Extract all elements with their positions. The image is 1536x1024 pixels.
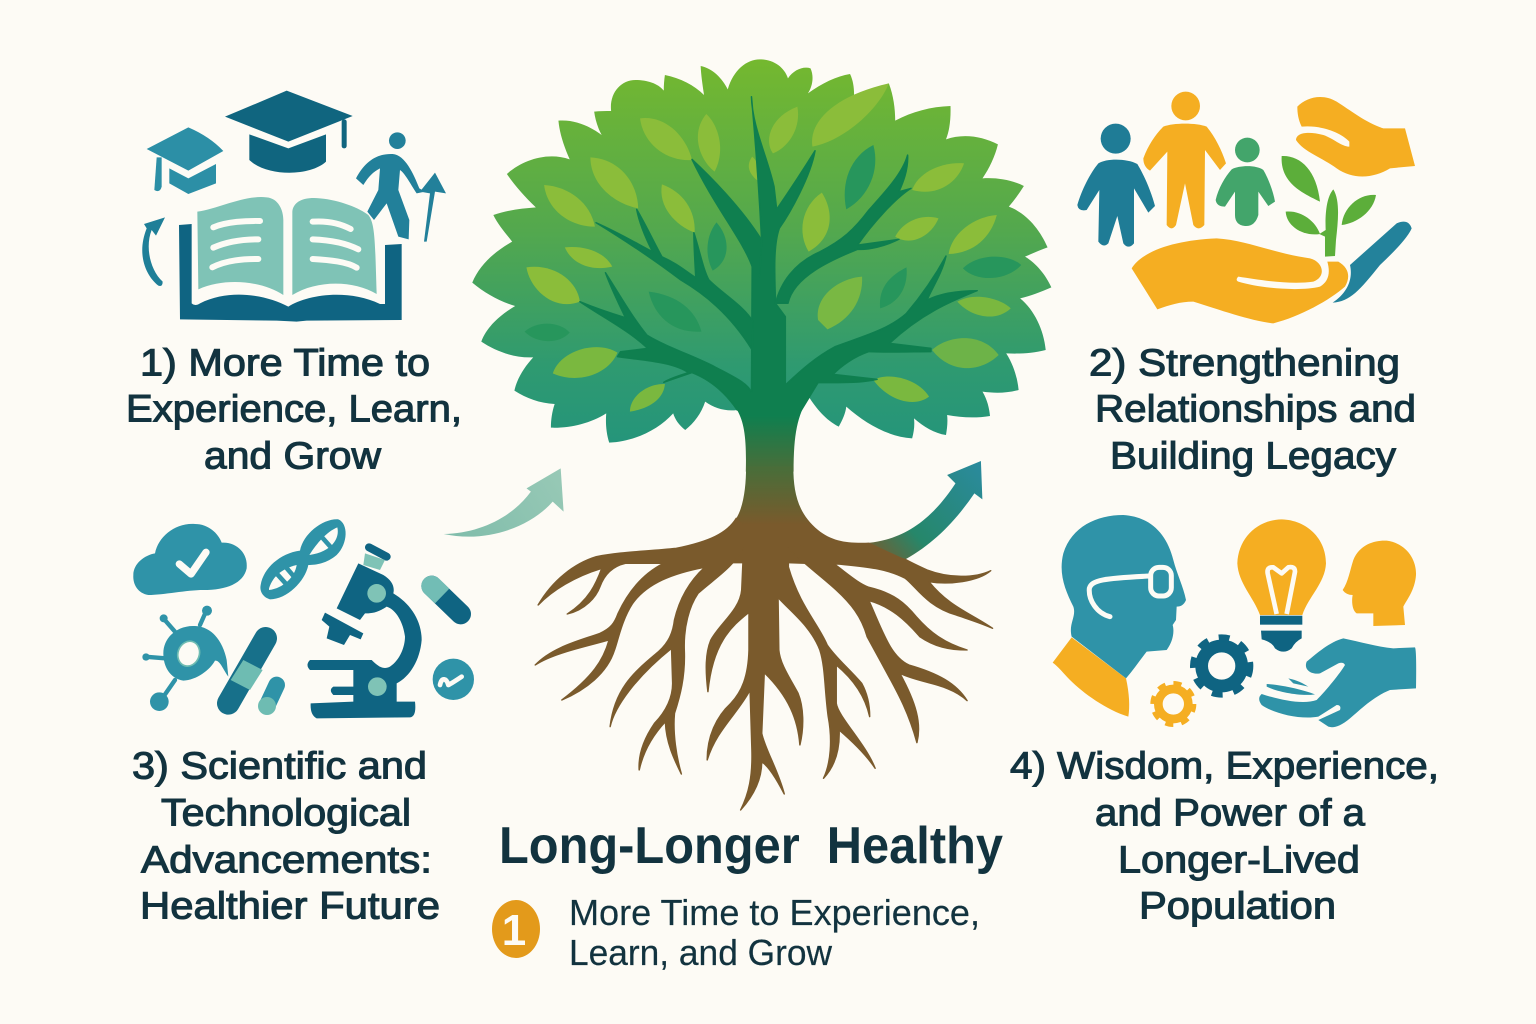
heading 1 (126, 342, 462, 478)
heading 3: Advancements: (141, 840, 432, 882)
number badge: 1 (502, 906, 526, 955)
heading 4: and Power of a (1095, 792, 1366, 834)
icon: capsule (421, 576, 461, 614)
heading 2: Building Legacy (1110, 436, 1396, 478)
subtitle text (569, 892, 980, 973)
trunk and roots (444, 461, 993, 810)
icon group: family and legacy (1077, 92, 1415, 323)
icon: small orange gear (1153, 684, 1193, 724)
heading 2: 2) Strengthening (1089, 342, 1400, 384)
heading 2 (1089, 342, 1416, 478)
icon: virus cell (142, 606, 228, 711)
root system (535, 518, 993, 810)
icon: small pill (258, 685, 277, 715)
heading 1: Experience, Learn, (126, 388, 462, 430)
tree canopy (472, 59, 1051, 472)
heading 4: Population (1139, 886, 1336, 928)
icon: open book (179, 197, 402, 322)
icon: teal sleeve (1333, 222, 1412, 303)
icon: lower hand (1132, 238, 1348, 323)
icon: DNA strand (260, 519, 346, 599)
heading 3 (132, 746, 440, 928)
branches (580, 97, 977, 417)
heading 4: Longer-Lived (1118, 840, 1360, 882)
heading 4 (1010, 746, 1439, 928)
icon: walking person with arrow (356, 132, 446, 242)
light leaves (526, 83, 1011, 412)
subtitle text: More Time to Experience, (569, 892, 980, 933)
trunk base (694, 467, 905, 565)
icon: small head (1343, 541, 1416, 626)
icon: orange person (1143, 92, 1226, 228)
heading 1: and Grow (204, 436, 382, 478)
heading 3: Technological (161, 792, 411, 834)
icon: large graduation cap (225, 91, 353, 173)
icon: sprout (1282, 156, 1376, 257)
icon: open hand (1259, 638, 1416, 727)
dark leaves (525, 145, 1021, 341)
heading 3: 3) Scientific and (132, 746, 427, 788)
icon: dark gear (1194, 638, 1250, 694)
heading 3: Healthier Future (140, 886, 440, 928)
heading 2: Relationships and (1095, 388, 1416, 430)
icon group: wisdom and experience (1053, 515, 1416, 727)
icon: head with glasses (1053, 515, 1186, 717)
icon: green child (1216, 138, 1275, 226)
icon: pill (228, 638, 266, 703)
arrow: left faded growth arrow (444, 468, 564, 537)
icon: curved arrow (142, 217, 165, 286)
icon: round badge (433, 659, 474, 700)
icon: upper hand (1296, 97, 1415, 176)
arrow: right growth arrow (851, 461, 982, 560)
icon group: education and learning (142, 91, 446, 322)
heading 1: 1) More Time to (140, 342, 430, 384)
title: Long-Longer Healthy (499, 817, 1003, 875)
subtitle text: Learn, and Grow (569, 932, 833, 973)
icon: small graduation cap (147, 127, 223, 194)
upper trunk (737, 383, 809, 472)
canopy foliage outline (472, 59, 1051, 443)
number badge (492, 900, 540, 958)
icon: cloud with check (133, 524, 247, 595)
heading 4: 4) Wisdom, Experience, (1010, 746, 1439, 788)
icon: light bulb (1237, 519, 1326, 652)
icon: blue person (1077, 124, 1155, 247)
icon group: science and technology (133, 519, 474, 718)
icon: microscope (307, 547, 422, 718)
